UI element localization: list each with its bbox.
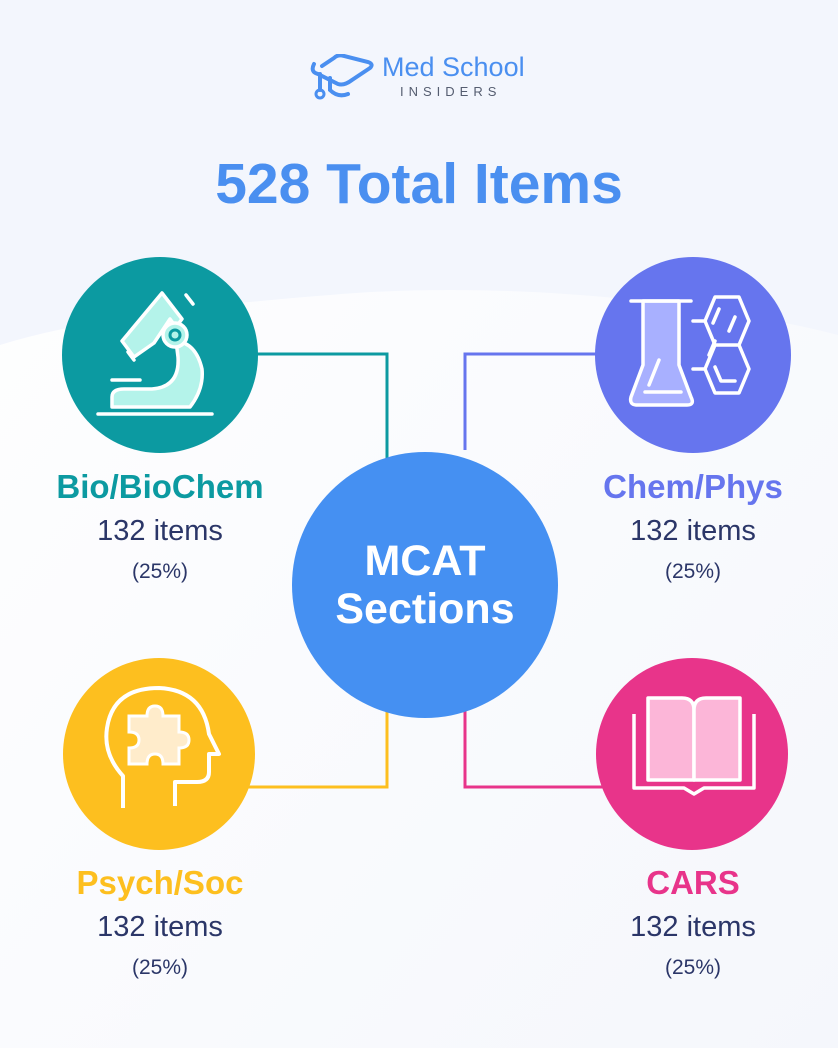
label: Chem: (25%) — [665, 560, 721, 583]
label: Bio — [56, 468, 264, 583]
logo — [310, 52, 525, 100]
label: Psych: (25%) — [132, 956, 188, 979]
label: Psych: Psych/Soc — [77, 864, 243, 901]
center circle — [292, 452, 558, 718]
label: Bio: Bio/BioChem — [56, 468, 264, 505]
label: CARS: (25%) — [665, 956, 721, 979]
label: Chem — [603, 468, 783, 583]
center circle: Sections — [335, 585, 515, 633]
label: CARS: CARS — [646, 864, 740, 901]
label: Chem: 132 items — [630, 515, 756, 547]
label: Bio: 132 items — [97, 515, 223, 547]
label: CARS: 132 items — [630, 911, 756, 943]
label: Chem: Chem/Phys — [603, 468, 783, 505]
center circle: MCAT — [364, 537, 486, 585]
logo: Med School — [382, 52, 525, 82]
icon: head puzzle circle — [63, 658, 255, 850]
icon: flask circle — [595, 257, 791, 453]
icon: book circle — [596, 658, 788, 850]
label: Bio: (25%) — [132, 560, 188, 583]
label: Psych: 132 items — [97, 911, 223, 943]
title: 528 Total Items — [215, 152, 623, 216]
label: Psych — [77, 864, 243, 979]
icon: microscope circle — [62, 257, 258, 453]
logo: INSIDERS — [400, 84, 501, 99]
label: CARS — [630, 864, 756, 979]
